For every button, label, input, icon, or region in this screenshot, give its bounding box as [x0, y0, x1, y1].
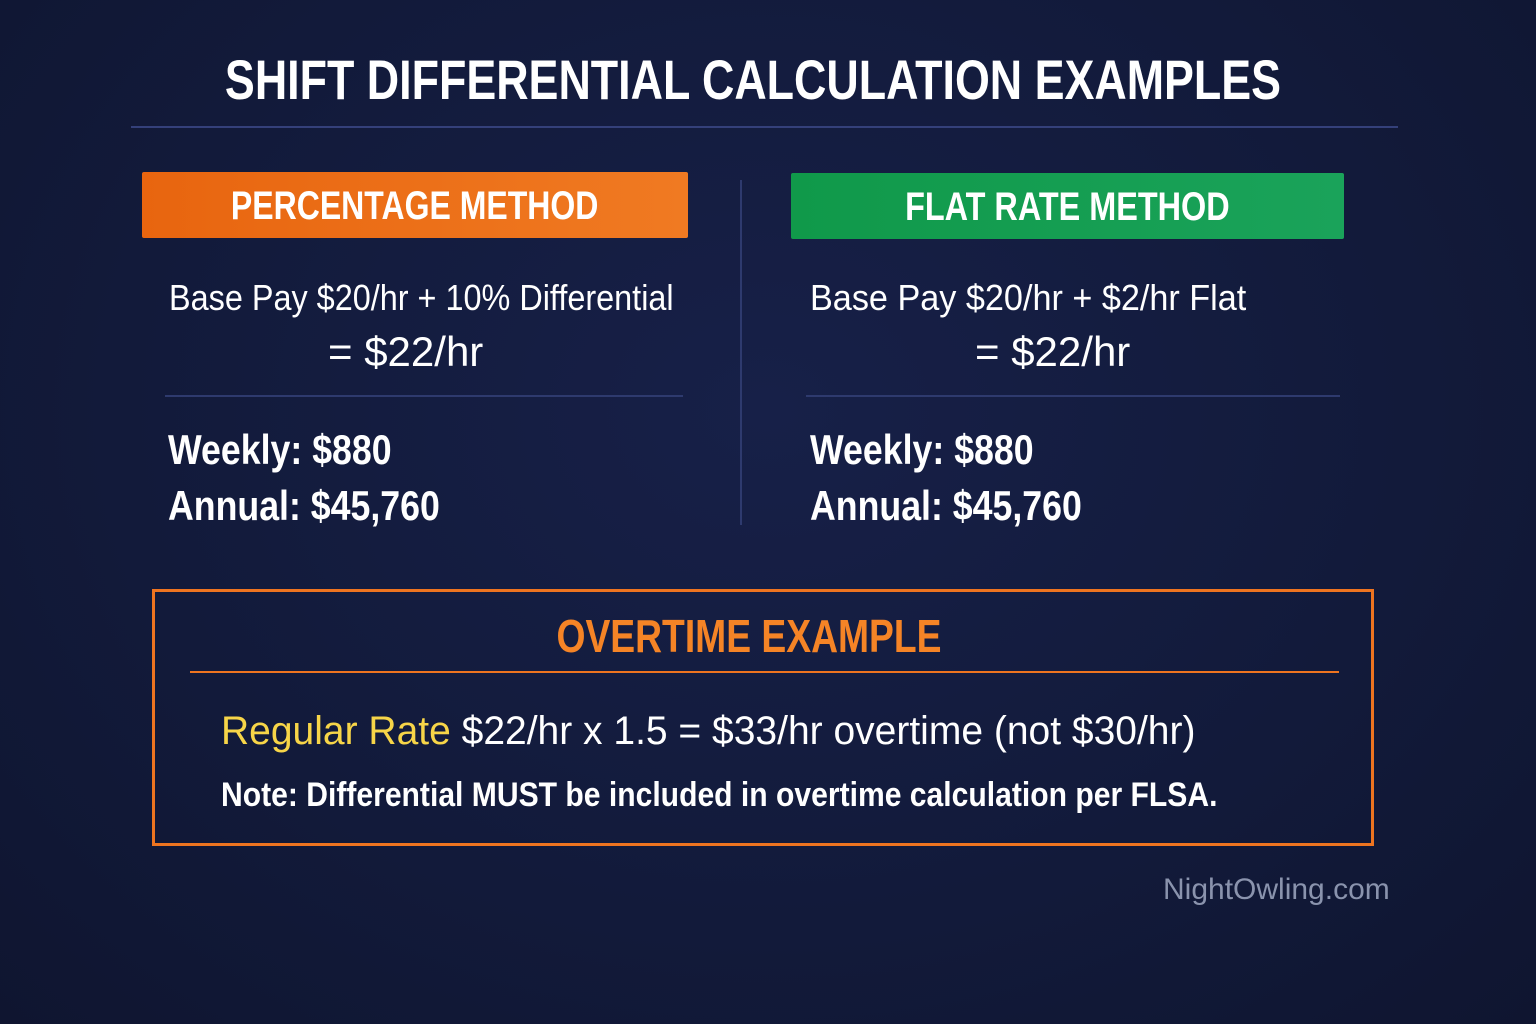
note: Note: Differential MUST be included in overtime calculation per FLSA. — [221, 776, 1217, 814]
totals: flat: Annual: $45,760 — [810, 482, 1082, 529]
header: percentage method — [142, 172, 688, 238]
header: flat rate method — [791, 173, 1344, 239]
panel: overtime example — [152, 589, 1374, 846]
totals: flat: Weekly: $880 — [810, 426, 1034, 473]
panel: percentage method — [142, 172, 688, 529]
formula: percentage: = $22/hr — [328, 328, 483, 375]
title: SHIFT DIFFERENTIAL CALCULATION EXAMPLES — [225, 48, 1281, 111]
formula: flat: = $22/hr — [975, 328, 1130, 375]
header: percentage method: PERCENTAGE METHOD — [231, 184, 599, 228]
totals: flat — [810, 426, 1082, 529]
panel: flat rate method — [791, 173, 1344, 529]
formula: percentage — [169, 277, 674, 375]
formula: percentage: Base Pay $20/hr + 10% Differential — [169, 277, 674, 318]
totals: percentage — [168, 426, 440, 529]
formula: flat — [810, 277, 1246, 375]
formula: flat: Base Pay $20/hr + $2/hr Flat — [810, 277, 1246, 318]
footer brand: NightOwling.com — [1163, 873, 1390, 906]
overtime heading: OVERTIME EXAMPLE — [556, 610, 942, 662]
totals: percentage: Annual: $45,760 — [168, 482, 440, 529]
overtime formula: Regular Rate $22/hr x 1.5 = $33/hr overtime (not $30/hr) — [221, 709, 1195, 753]
header: flat rate method: FLAT RATE METHOD — [905, 185, 1230, 229]
totals: percentage: Weekly: $880 — [168, 426, 392, 473]
